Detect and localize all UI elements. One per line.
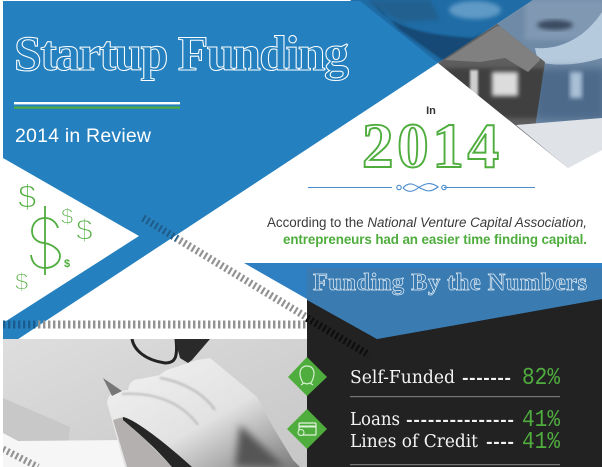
row: self-funded: Self-Funded — [350, 368, 455, 388]
row: lines of credit: Lines of Credit — [350, 432, 478, 452]
panel: black numbers panel — [307, 268, 602, 467]
row: self-funded: ------- — [462, 368, 511, 387]
row: loans: 41% — [522, 407, 561, 434]
icon: dollar signs: $ — [61, 204, 73, 229]
horizontal hatch band — [3, 320, 307, 328]
row: lines of credit: 41% — [522, 429, 561, 456]
panel: bottom photo hand — [3, 339, 307, 467]
row: lines of credit — [350, 429, 561, 456]
icon: dollar signs: $ — [15, 269, 28, 296]
row divider — [350, 396, 560, 397]
heading: Funding By the Numbers — [313, 269, 587, 296]
row: lines of credit: ---- — [486, 432, 514, 451]
title: Startup Funding — [14, 25, 349, 81]
icon: dollar signs: $ — [18, 178, 36, 215]
diagonal hatch band — [143, 218, 369, 355]
panel: top-right handshake photo — [350, 0, 602, 168]
icon: person diamond — [288, 357, 327, 396]
heading banner — [244, 263, 602, 339]
intro text: entrepreneurs had an easier time finding capital. — [283, 232, 587, 247]
panel: blue header shape — [3, 1, 438, 349]
icon: dollar signs: $ — [76, 214, 93, 247]
row: self-funded — [350, 365, 561, 392]
intro text — [267, 215, 587, 247]
row: loans: --------------- — [406, 410, 514, 429]
year 2014: 2014 — [362, 111, 499, 181]
subtitle: 2014 in Review — [15, 125, 152, 147]
title underline — [14, 102, 180, 109]
label: In: In — [426, 105, 436, 117]
row: self-funded: 82% — [522, 365, 561, 392]
icon: dollar signs: $ — [64, 258, 70, 270]
icon: dollar signs — [15, 178, 93, 296]
row: loans — [350, 407, 561, 434]
hatch on the black panel — [307, 318, 369, 355]
row divider — [350, 464, 560, 465]
ornament divider — [308, 184, 535, 191]
row: loans: Loans — [350, 410, 400, 430]
panel: white area below the photo — [200, 63, 602, 263]
intro text: According to the National Venture Capital Association, — [267, 215, 587, 230]
icon: credit card diamond — [287, 409, 327, 449]
